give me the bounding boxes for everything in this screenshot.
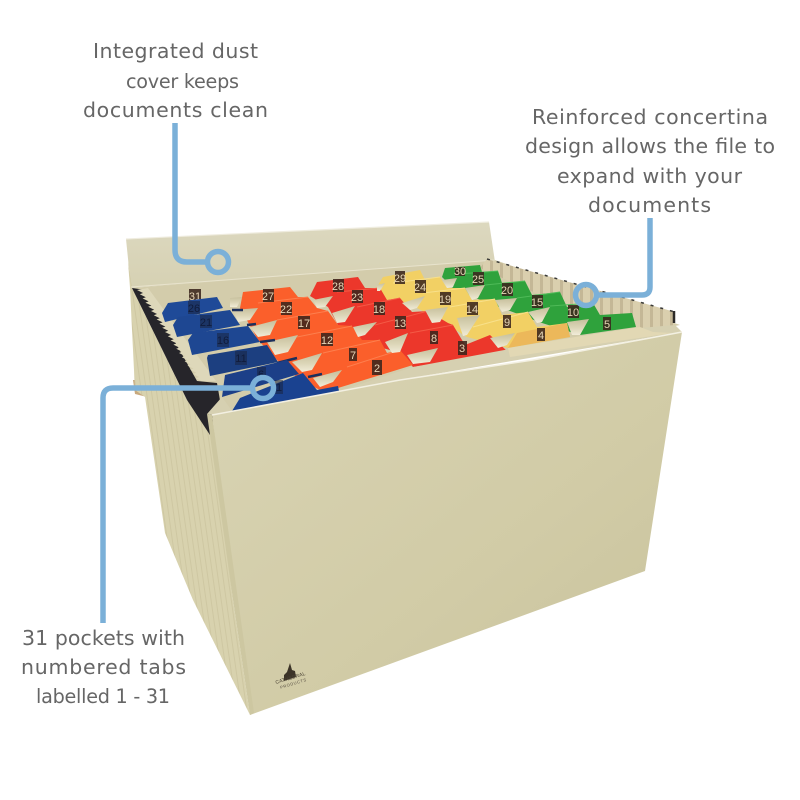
connector: dust cover	[175, 123, 207, 262]
cover top edge highlight	[126, 222, 489, 239]
green tabs: 25	[472, 274, 484, 286]
blue tabs	[162, 297, 339, 411]
green tabs: 15	[531, 297, 543, 309]
yellow tabs: 4	[538, 330, 544, 342]
orange tabs: 17	[298, 318, 310, 330]
orange tabs: 22	[280, 304, 292, 316]
green tabs: 20	[501, 285, 513, 297]
Cathedral Products logo: CATHEDRAL	[275, 671, 306, 686]
callout text: numbered pockets: 31 pockets with	[22, 626, 185, 650]
red tabs: 23	[351, 292, 363, 304]
callout text: dust cover: documents clean	[83, 98, 268, 122]
green tabs	[442, 265, 636, 335]
yellow tabs: 14	[466, 304, 478, 316]
orange tabs: 7	[350, 350, 356, 362]
callout text: concertina: design allows the file to	[525, 134, 775, 158]
callout text: concertina: expand with your	[557, 164, 743, 188]
black pleats on the left	[132, 288, 222, 435]
red tabs: 18	[373, 304, 385, 316]
callout text: dust cover: cover keeps	[126, 70, 239, 93]
marker: concertina	[576, 284, 596, 306]
connector: concertina	[597, 218, 650, 295]
Cathedral Products logo	[275, 663, 308, 691]
green tabs: 5	[604, 319, 610, 331]
callout: concertina	[525, 105, 775, 306]
yellow tabs: 29	[394, 273, 406, 285]
callout text: concertina: documents	[588, 193, 711, 217]
red tabs: 13	[394, 318, 406, 330]
red tabs: 28	[332, 281, 344, 293]
callout: dust cover	[83, 39, 268, 272]
green tabs: 10	[567, 307, 579, 319]
connector: numbered pockets	[103, 388, 252, 623]
blue tabs: 1	[276, 382, 282, 394]
red tabs	[310, 277, 508, 367]
marker: numbered pockets	[252, 378, 274, 398]
orange tabs: 2	[374, 363, 380, 375]
yellow tabs: 9	[504, 317, 510, 329]
blue tabs: 26	[188, 303, 200, 315]
tab 31 label on the rear wall: 31	[189, 291, 201, 303]
callout text: numbered pockets	[21, 626, 186, 708]
file interior wall	[131, 260, 680, 418]
cream pockets between tabs	[230, 278, 589, 387]
front panel left bevel	[207, 414, 254, 715]
front panel	[212, 332, 682, 715]
callout text: concertina	[525, 105, 775, 217]
blue tabs: 16	[217, 335, 229, 347]
front panel rim	[207, 325, 682, 415]
orange tabs	[240, 287, 413, 390]
yellow tabs	[375, 270, 570, 348]
callout: numbered pockets	[21, 378, 274, 708]
left concertina side	[128, 262, 250, 715]
yellow tabs: 19	[439, 294, 451, 306]
callout text: concertina: Reinforced concertina	[532, 105, 768, 129]
Cathedral Products logo: PRODUCTS	[279, 677, 307, 690]
red tabs: 3	[459, 343, 465, 355]
blue tabs: 11	[235, 353, 247, 365]
orange tabs: 12	[321, 335, 333, 347]
rim inner strip	[508, 327, 672, 357]
callout text: dust cover	[83, 39, 268, 122]
tan flap corner	[133, 380, 147, 397]
crease highlight	[131, 260, 495, 287]
blue tabs: 21	[200, 317, 212, 329]
marker: dust cover	[208, 252, 228, 272]
blue tabs: 6	[258, 369, 264, 381]
green tabs: 30	[454, 266, 466, 278]
yellow tabs: 24	[414, 282, 426, 294]
callout text: numbered pockets: numbered tabs	[21, 655, 186, 679]
red tabs: 8	[431, 333, 437, 345]
callout text: dust cover: Integrated dust	[93, 39, 258, 63]
orange tabs: 27	[262, 291, 274, 303]
callout text: numbered pockets: labelled 1 - 31	[36, 685, 170, 708]
dust cover back panel	[126, 222, 495, 288]
product: expanding file box	[126, 222, 682, 715]
front panel top edge highlight	[212, 332, 682, 415]
right concertina pleats	[480, 259, 675, 333]
